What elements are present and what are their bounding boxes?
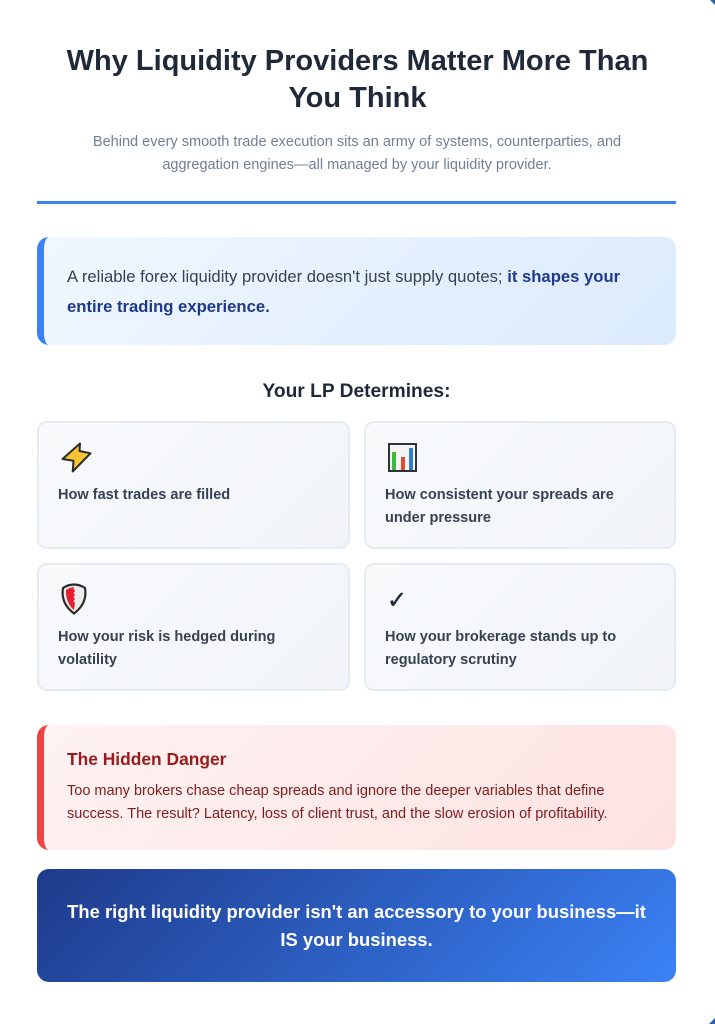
page corner: top right	[710, 0, 715, 5]
page corner: bottom right	[709, 1018, 715, 1024]
danger text	[67, 783, 608, 822]
card text: volatility	[58, 652, 117, 668]
panel: hidden danger callout	[37, 725, 676, 850]
card text	[385, 487, 614, 526]
header divider	[37, 201, 676, 204]
panel: spreads card	[364, 421, 676, 549]
subtitle	[93, 134, 621, 173]
danger text: Too many brokers chase cheap spreads and ignore the deeper variables that define	[67, 783, 604, 799]
title: Why Liquidity Providers Matter More Than	[67, 45, 648, 77]
intro text: A reliable forex liquidity provider doesn't just supply quotes; it shapes your	[67, 267, 620, 286]
icon: bar chart	[388, 443, 417, 472]
conclusion text	[67, 901, 646, 950]
panel: fill speed card	[37, 421, 350, 549]
card text: under pressure	[385, 510, 491, 526]
panel: conclusion banner	[37, 869, 676, 982]
card text: How your brokerage stands up to	[385, 629, 616, 645]
intro text	[67, 267, 620, 316]
intro text: entire trading experience.	[67, 297, 270, 316]
title: You Think	[288, 82, 426, 114]
card text: How fast trades are filled	[58, 487, 230, 503]
subtitle: aggregation engines—all managed by your liquidity provider.	[162, 157, 552, 173]
card text: How your risk is hedged during	[58, 629, 275, 645]
card text	[385, 629, 616, 668]
icon: lightning bolt	[62, 442, 92, 472]
card text: How consistent your spreads are	[385, 487, 614, 503]
card text	[58, 629, 275, 668]
icon: check mark: ✓	[387, 586, 407, 614]
panel: risk hedging card	[37, 563, 350, 691]
panel: intro callout	[37, 237, 676, 345]
card text: regulatory scrutiny	[385, 652, 517, 668]
subtitle: Behind every smooth trade execution sits an army of systems, counterparties, and	[93, 134, 621, 150]
conclusion text: The right liquidity provider isn't an accessory to your business—it	[67, 901, 646, 922]
title	[66, 45, 648, 114]
danger text: success. The result? Latency, loss of client trust, and the slow erosion of profitability.	[67, 806, 608, 822]
conclusion text: IS your business.	[280, 929, 433, 950]
section heading: Your LP Determines:	[262, 380, 450, 402]
icon: shield	[62, 583, 86, 615]
danger heading: The Hidden Danger	[67, 749, 226, 769]
panel: regulatory card	[364, 563, 676, 691]
